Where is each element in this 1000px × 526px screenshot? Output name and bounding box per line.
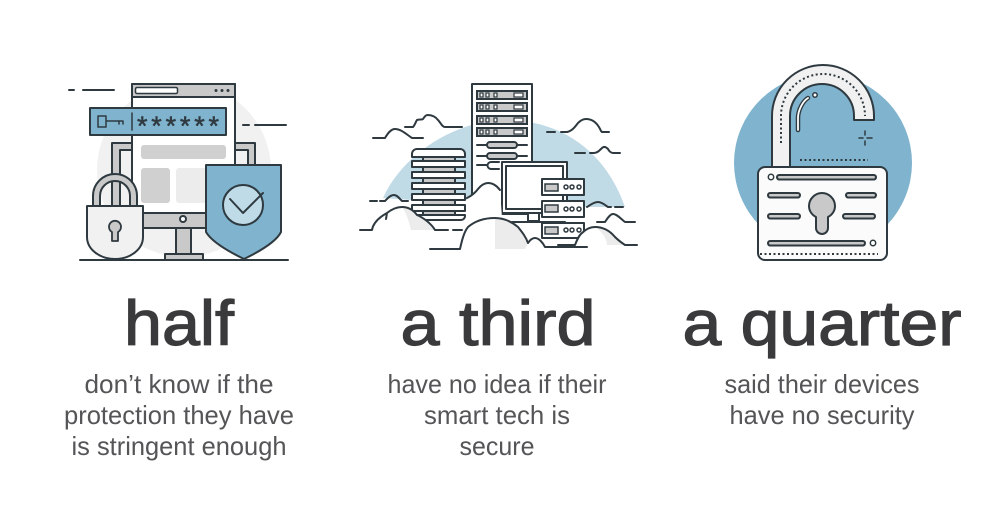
sparkle	[859, 131, 872, 145]
monitor	[112, 143, 255, 260]
text: half description: is stringent enough	[72, 431, 286, 461]
browser window	[132, 84, 235, 213]
text: half description	[64, 369, 294, 461]
text: a third description: secure	[460, 431, 534, 461]
upper and side clouds	[373, 115, 462, 138]
large middle cloud	[460, 218, 545, 249]
large left cloud	[372, 207, 435, 230]
clouds	[360, 115, 637, 249]
text: a third description: have no idea if their	[388, 369, 607, 399]
text: a quarter description: have no security	[730, 400, 914, 430]
password field	[90, 108, 226, 141]
heading: a third: a third	[400, 289, 596, 359]
text: half description: don’t know if the	[84, 369, 274, 399]
icon: servers in the cloud	[360, 84, 637, 249]
text: a quarter description: said their devices	[724, 369, 920, 399]
lock body	[758, 167, 887, 260]
text: a quarter description	[724, 369, 920, 430]
padlock	[87, 174, 143, 259]
left server stack	[412, 149, 465, 220]
keyhole	[809, 193, 835, 234]
monitor	[502, 162, 567, 222]
heading: a quarter: a quarter	[682, 289, 962, 359]
tall server	[472, 84, 532, 214]
icon: browser login and shield	[69, 83, 288, 260]
rack units	[542, 179, 584, 238]
text: a third description	[388, 369, 607, 461]
password field: ******	[137, 111, 219, 141]
shackle	[772, 65, 874, 168]
right lower cloud	[575, 227, 625, 245]
text: a third description: smart tech is	[424, 400, 570, 430]
icon: open padlock	[734, 65, 912, 260]
text: half description: protection they have	[64, 400, 294, 430]
heading: half: half	[124, 289, 235, 359]
middle small cloud	[467, 183, 502, 222]
shield	[206, 165, 281, 259]
